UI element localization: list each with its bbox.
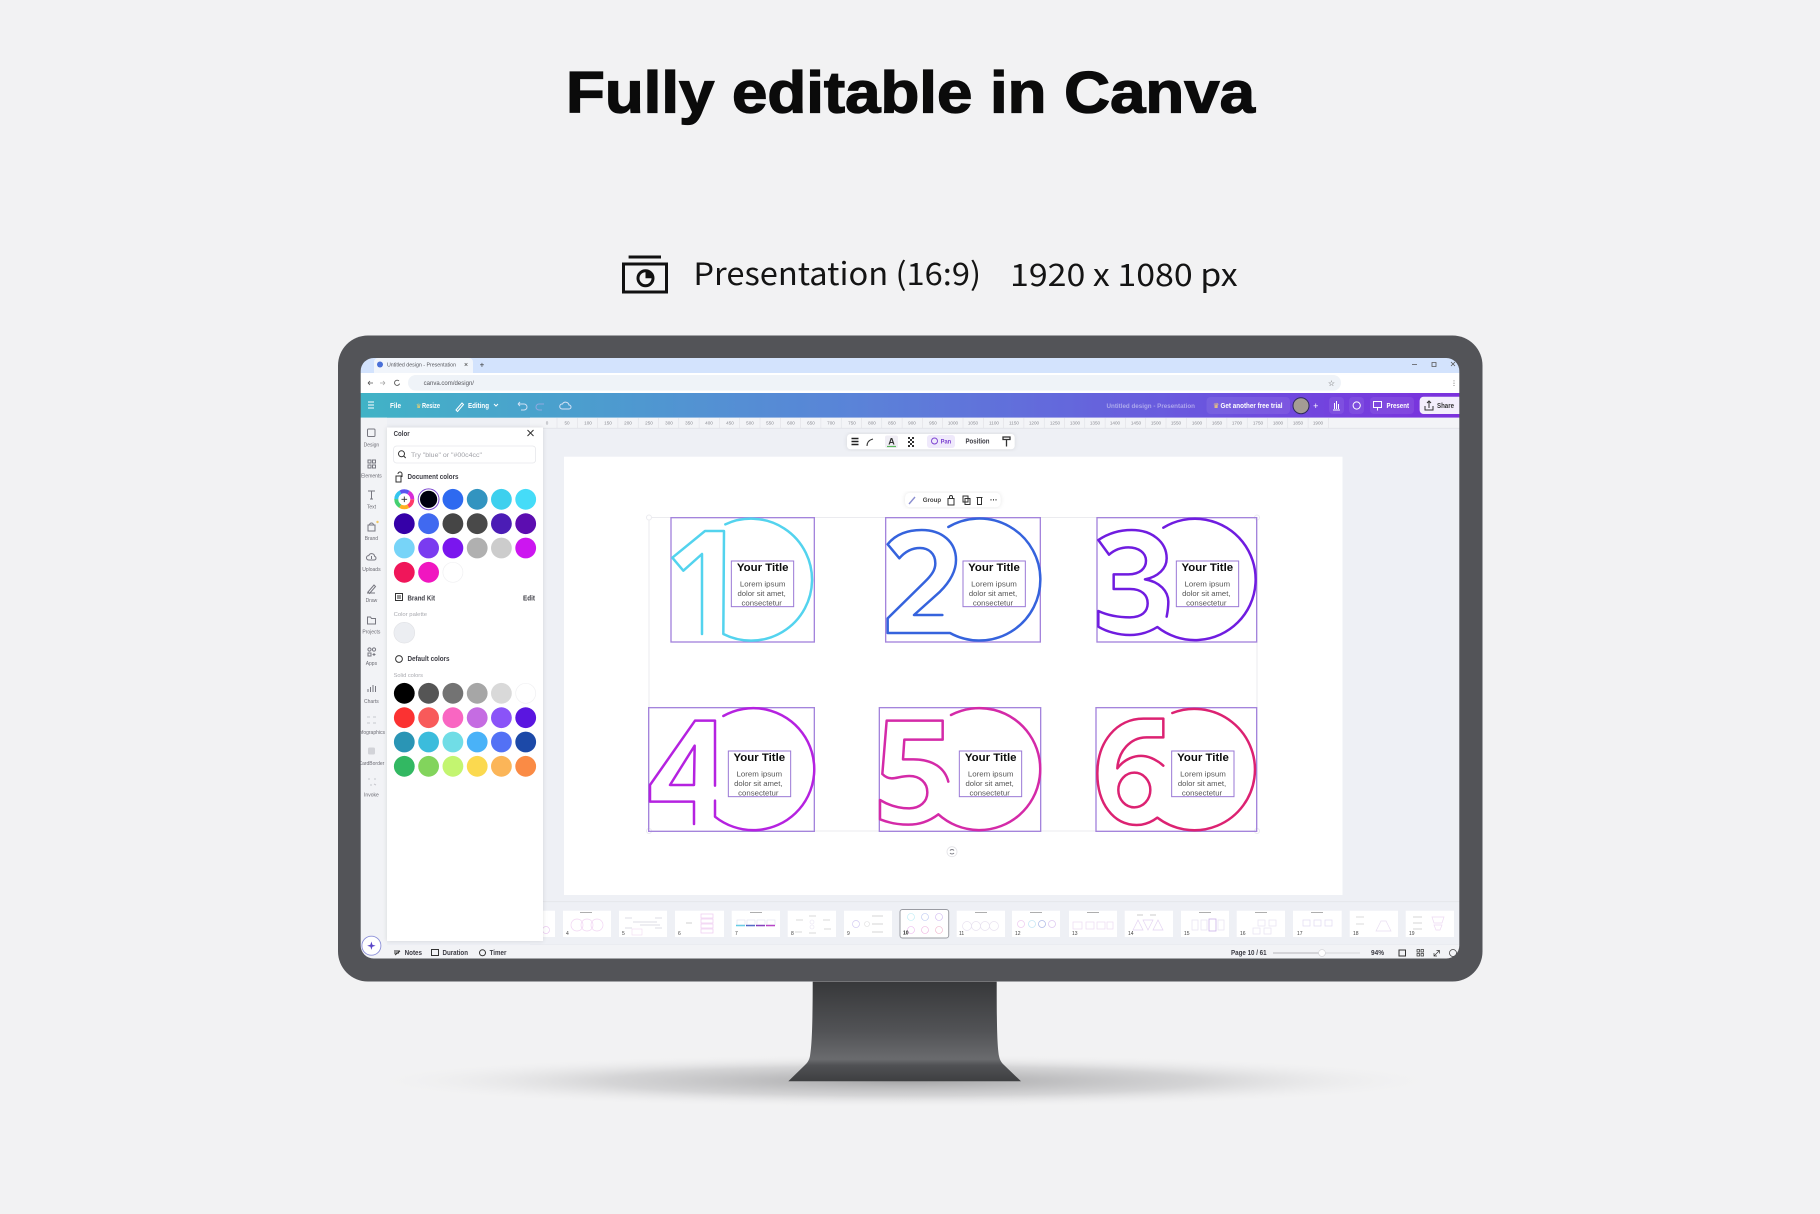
ruler labels: 700 [827, 420, 835, 426]
browser tab bar [360, 358, 1460, 373]
thumbnail 16 [1237, 911, 1285, 937]
brand kit heading: Brand Kit [408, 595, 436, 602]
invoke [364, 779, 379, 798]
thumbnail 17: 17 [1297, 931, 1303, 937]
text 5 [959, 751, 1022, 798]
ruler labels: 150 [604, 420, 612, 426]
paint roller icon [1003, 437, 1010, 446]
free trial button: ♛ [1213, 402, 1219, 410]
free trial button [1207, 397, 1290, 414]
elements: Elements [361, 474, 382, 480]
bounding box 5 [879, 708, 1041, 831]
ruler labels: 1150 [1009, 420, 1019, 426]
thumbnail 6: 6 [678, 931, 681, 937]
text 5: Your Title [965, 752, 1016, 764]
ruler labels: 250 [645, 420, 653, 426]
thumbnail 7: 7 [735, 931, 738, 937]
thumbnail 15 [1181, 911, 1229, 937]
avatar [1293, 398, 1309, 414]
default colors heading [396, 656, 450, 663]
thumbnail 12 [1012, 911, 1060, 937]
timer: Timer [490, 950, 507, 957]
text 4: Your Title [733, 752, 785, 764]
thumbnail 10 selected [900, 910, 949, 938]
editing [456, 403, 498, 412]
text 4: dolor sit amet, [734, 779, 782, 788]
ruler labels: 1900 [1313, 420, 1324, 426]
ruler labels: 1800 [1273, 420, 1284, 426]
browser menu [1454, 380, 1455, 386]
text 2: consectetur [973, 599, 1014, 608]
panel title: Color [394, 431, 410, 438]
numeral 5 [880, 708, 1040, 830]
insights and comments [1329, 397, 1364, 414]
charts: Charts [364, 699, 379, 705]
document name: Untitled design - Presentation [1106, 403, 1195, 410]
text 3: dolor sit amet, [1182, 589, 1230, 598]
format name: Presentation (16:9) [693, 249, 981, 294]
draw: Draw [366, 598, 378, 604]
bounding box 6 [1096, 708, 1257, 831]
solid colors label: Solid colors [394, 673, 423, 679]
infographics [358, 717, 386, 736]
search box [394, 446, 536, 463]
ruler labels: 1000 [948, 420, 959, 426]
tab title: Untitled design - Presentation [387, 362, 456, 368]
default color swatches [394, 683, 536, 777]
line style icon [852, 438, 858, 444]
thumbnail 13: 13 [1072, 931, 1078, 937]
transparency icon [908, 437, 914, 447]
url: canva.com/design/ [424, 381, 474, 387]
thumbnail 17 [1293, 911, 1342, 937]
text 6: Lorem ipsum [1180, 769, 1226, 778]
format line [624, 249, 1238, 295]
present button [1370, 397, 1414, 414]
ruler labels: 1700 [1232, 420, 1243, 426]
document colors heading: Document colors [408, 474, 459, 481]
address bar [360, 373, 1460, 393]
new tab: + [480, 360, 485, 370]
floating format toolbar [847, 434, 1015, 450]
edit link: Edit [523, 595, 536, 602]
thumbnail 18: 18 [1353, 931, 1359, 937]
left rail [358, 418, 387, 959]
canva top toolbar [360, 393, 1465, 418]
text 6 [1172, 751, 1234, 798]
magic icon [909, 497, 915, 504]
duration: Duration [442, 950, 468, 957]
notes: Notes [405, 950, 422, 957]
copy icon [963, 496, 970, 504]
text 4: Lorem ipsum [736, 769, 782, 778]
trash icon [976, 498, 982, 504]
text 3: consectetur [1186, 599, 1227, 608]
text 1: dolor sit amet, [737, 589, 786, 598]
text 4: consectetur [738, 789, 779, 798]
numeral 6 [1097, 709, 1255, 830]
thumbnail 5 [619, 911, 667, 937]
text 2: dolor sit amet, [969, 589, 1017, 598]
invoke: Invoke [364, 792, 379, 798]
thumbnail 8 [788, 911, 836, 937]
text 2 [963, 561, 1025, 608]
design [364, 429, 379, 448]
bounding box 4 [649, 708, 814, 831]
ruler labels: 800 [868, 420, 876, 426]
thumbnail 11: 11 [959, 931, 964, 937]
thumbnail 3 [507, 911, 555, 937]
file: File [390, 403, 401, 410]
ruler labels: 1600 [1192, 420, 1203, 426]
thumbnail 12: 12 [1015, 931, 1021, 937]
thumbnail 4: 4 [566, 931, 569, 937]
thumbnail 18 [1350, 911, 1398, 937]
numeral 3 [1098, 519, 1256, 640]
text 3 [1176, 561, 1239, 608]
add color wheel [396, 491, 412, 507]
thumbnail strip [360, 902, 1460, 959]
resize [416, 402, 440, 408]
resize: Resize [422, 403, 440, 410]
text colour icon [885, 436, 898, 448]
infographics: Infographics [358, 730, 386, 736]
lock icon [948, 496, 954, 505]
ruler labels: 1650 [1212, 420, 1223, 426]
ruler labels: 1250 [1050, 420, 1061, 426]
thumbnail 19: 19 [1409, 931, 1415, 937]
footer bar [394, 950, 1456, 957]
ruler labels [546, 422, 1323, 424]
ruler labels: 1550 [1171, 420, 1182, 426]
palette swatch [394, 622, 415, 643]
card border [358, 748, 385, 767]
numeral 4 [650, 708, 814, 830]
ruler labels: 550 [766, 420, 774, 426]
color palette label: Color palette [394, 612, 427, 618]
text colour icon: A [888, 436, 895, 446]
free trial button: Get another free trial [1220, 403, 1283, 410]
ruler labels: 1200 [1029, 420, 1040, 426]
search box: Try "blue" or "#00c4cc" [411, 453, 482, 459]
slide page [564, 457, 1342, 895]
group toolbar [905, 493, 1001, 507]
timer [480, 950, 507, 957]
ruler labels: 450 [726, 420, 734, 426]
ruler labels: 1450 [1131, 420, 1142, 426]
ruler labels: 500 [746, 420, 754, 426]
document color swatches [394, 489, 536, 583]
text 2: Your Title [968, 562, 1020, 574]
text 5: dolor sit amet, [965, 779, 1014, 788]
number 1 card [671, 518, 814, 642]
monitor bezel [338, 336, 1482, 982]
corner icon [867, 439, 873, 446]
ruler labels: 0 [546, 420, 549, 426]
monitor screen [358, 358, 1465, 959]
magic assistant button [362, 936, 381, 955]
draw [366, 585, 378, 604]
pan button: Pan [941, 438, 951, 446]
add collaborator: + [1313, 401, 1318, 411]
zoom slider [1273, 950, 1360, 956]
text 1: Your Title [737, 562, 788, 574]
number 5 card [879, 708, 1041, 831]
thumbnail 15: 15 [1184, 931, 1190, 937]
brand: Brand [365, 536, 378, 542]
ruler labels: 1300 [1070, 420, 1081, 426]
stand shadow [365, 1054, 1445, 1108]
document colors heading [396, 472, 459, 482]
ruler labels: 1350 [1090, 420, 1101, 426]
numeral 6 counter [1118, 773, 1150, 807]
brand kit heading [396, 594, 436, 602]
elements [361, 460, 382, 480]
ruler labels: 600 [787, 420, 795, 426]
navigation icons [368, 381, 373, 385]
browser tab [374, 358, 473, 373]
ruler labels: 1400 [1110, 420, 1121, 426]
bookmark star: ☆ [1328, 379, 1335, 388]
card border: CardBorder [358, 761, 385, 767]
position button: Position [966, 438, 990, 446]
ruler labels: 400 [705, 420, 713, 426]
numeral 2 [888, 519, 1040, 641]
favicon [377, 362, 383, 368]
thumbnail 6 [675, 911, 724, 937]
ruler labels: 1850 [1293, 420, 1304, 426]
ruler labels: 1050 [968, 420, 979, 426]
charts [364, 685, 379, 705]
duration [432, 950, 468, 957]
screen background [360, 418, 1460, 945]
text 5: Lorem ipsum [968, 769, 1013, 778]
more icon [990, 499, 996, 501]
apps [366, 648, 378, 667]
apps: Apps [366, 661, 378, 667]
view icons [1399, 950, 1456, 956]
page counter: Page 10 / 61 [1231, 950, 1267, 957]
ruler labels: 850 [888, 420, 896, 426]
share button [1420, 396, 1460, 414]
ruler labels: 750 [848, 420, 856, 426]
undo redo cloud [518, 402, 571, 410]
thumbnail 7 [732, 911, 780, 937]
bounding box 1 [671, 518, 814, 642]
thumbnail 16: 16 [1240, 931, 1246, 937]
ruler labels: 1500 [1151, 420, 1162, 426]
text 3: Lorem ipsum [1184, 579, 1230, 588]
format size: 1920 x 1080 px [1010, 250, 1238, 295]
text 3: Your Title [1181, 562, 1233, 574]
color panel [387, 428, 543, 941]
thumbnail 8: 8 [791, 931, 794, 937]
present button: Present [1386, 403, 1410, 410]
thumbnail 11 [957, 911, 1005, 937]
design: Design [364, 442, 379, 448]
thumbnail 13 [1069, 911, 1117, 937]
share button: Share [1437, 403, 1454, 410]
text 1: Lorem ipsum [740, 579, 785, 588]
number 4 card [649, 708, 814, 831]
ruler labels: 950 [929, 420, 937, 426]
resize: ♛ [416, 403, 421, 410]
group label: Group [923, 497, 941, 504]
thumbnail 19 [1406, 911, 1454, 937]
tab close: × [464, 362, 468, 369]
ruler labels: 200 [624, 420, 632, 426]
thumbnail 9 [844, 911, 892, 937]
uploads [362, 554, 381, 573]
bounding box 2 [886, 518, 1040, 642]
ruler labels: 650 [807, 420, 815, 426]
panel close [528, 430, 534, 436]
thumbnail 14: 14 [1128, 931, 1134, 937]
editing: Editing [468, 403, 489, 410]
thumbnail 4 [563, 911, 611, 937]
text 2: Lorem ipsum [971, 579, 1017, 588]
ruler labels: 900 [908, 420, 916, 426]
rotate handle [947, 847, 957, 857]
text 4 [728, 751, 791, 798]
icon: presentation [624, 257, 666, 292]
monitor stand [788, 982, 1021, 1081]
text 6: dolor sit amet, [1178, 779, 1226, 788]
bounding box 3 [1097, 518, 1257, 642]
title: Fully editable in Canva [566, 60, 1256, 125]
text 6: Your Title [1177, 752, 1229, 764]
ruler labels: 1100 [989, 420, 999, 426]
ruler labels: 50 [564, 420, 570, 426]
thumbnail 10 selected: 10 [903, 930, 909, 936]
notes [394, 950, 422, 957]
pan button [927, 435, 955, 448]
thumbnail 9: 9 [847, 931, 850, 937]
thumbnail 5: 5 [622, 931, 625, 937]
number 2 card [886, 518, 1040, 642]
ruler labels: 100 [584, 420, 592, 426]
selection outline [646, 515, 1260, 834]
ruler labels: 350 [685, 420, 693, 426]
projects [362, 617, 381, 636]
brand [365, 521, 379, 542]
number 6 card [1096, 708, 1257, 831]
text 1: consectetur [741, 599, 782, 608]
ruler [530, 418, 1460, 428]
menu icon [368, 402, 374, 408]
uploads: Uploads [362, 567, 381, 573]
thumbnail 14 [1125, 911, 1173, 937]
text tool [367, 491, 377, 510]
default colors heading: Default colors [408, 656, 450, 663]
window controls [1412, 362, 1455, 366]
text 6: consectetur [1182, 789, 1223, 798]
text tool: Text [367, 504, 377, 510]
projects: Projects [362, 630, 381, 636]
number 3 card [1097, 518, 1257, 642]
numeral 1 [672, 519, 812, 641]
zoom percent: 94% [1371, 950, 1385, 957]
text 5: consectetur [969, 789, 1010, 798]
text 1 [731, 561, 794, 608]
ruler labels: 1750 [1253, 420, 1264, 426]
ruler labels: 300 [665, 420, 673, 426]
